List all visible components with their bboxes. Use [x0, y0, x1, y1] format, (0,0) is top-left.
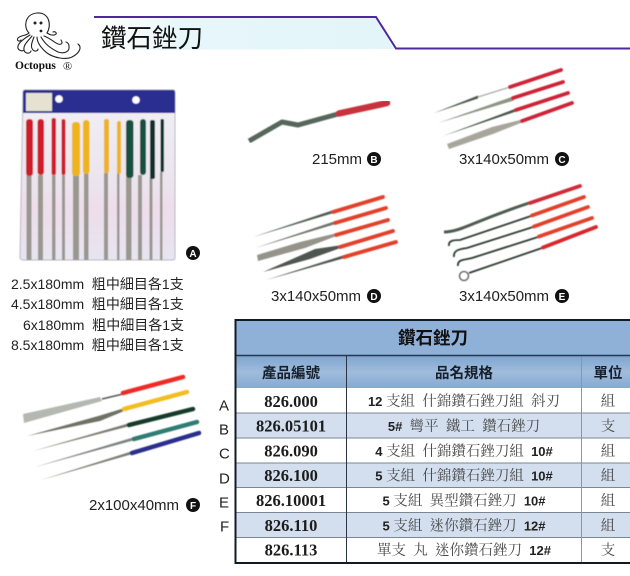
row B: 826.05101 [256, 416, 326, 436]
caption B: B [370, 155, 378, 166]
column headers: 產品編號 [262, 364, 320, 382]
row letters A to F: B [219, 422, 229, 438]
product photo D: 5 files [253, 197, 396, 280]
row G: 單支 丸 迷你鑽石銼刀 12# [377, 542, 552, 559]
row G: 826.113 [265, 540, 317, 560]
row B: 5# 彎平 鐵工 鑽石銼刀 [388, 418, 540, 435]
size list for A: 2.5x180mm 粗中細目各1支 [11, 276, 184, 292]
row F: 5 支組 迷你鑽石銼刀 12# [382, 518, 546, 534]
caption E: E [559, 292, 566, 303]
row E [256, 491, 616, 510]
row B [256, 416, 615, 436]
logo: octopus [15, 13, 80, 73]
caption D: 3x140x50mm [271, 288, 361, 305]
column headers: 品名規格 [435, 364, 493, 382]
row D: 組 [601, 468, 616, 484]
row A: 826.000 [264, 392, 318, 411]
title banner [94, 17, 630, 50]
product photo A: file pack [20, 90, 175, 260]
row D: 826.100 [264, 466, 318, 485]
size list for A: 4.5x180mm 粗中細目各1支 [11, 296, 184, 312]
row letters A to F: A [219, 398, 229, 414]
row C: 組 [601, 443, 616, 460]
column headers: 單位 [594, 364, 622, 382]
row E: 組 [601, 492, 616, 510]
caption D: D [370, 292, 378, 303]
product photo E: shaped files [444, 186, 596, 280]
product photo B: bent file [249, 103, 387, 141]
title: 鑽石銼刀 [101, 25, 203, 53]
row E: 5 支組 異型鑽石銼刀 10# [382, 492, 546, 510]
product photo C: 4 files [434, 70, 572, 149]
size list for A [11, 276, 184, 353]
row letters A to F: D [219, 470, 230, 488]
row F: 826.110 [265, 516, 317, 535]
row C [264, 442, 616, 460]
caption C: C [558, 155, 566, 166]
row G [265, 540, 615, 560]
product table [235, 319, 630, 564]
size list for A: 8.5x180mm 粗中細目各1支 [11, 337, 184, 353]
row F [265, 516, 616, 535]
caption F: 2x100x40mm [89, 497, 179, 514]
row A: 組 [601, 393, 616, 410]
size list for A: 6x180mm 粗中細目各1支 [23, 317, 184, 333]
row D: 5 支組 什錦鑽石銼刀組 10# [375, 468, 554, 484]
logo: octopus: ® [63, 59, 72, 73]
caption C: 3x140x50mm [459, 151, 549, 168]
row G: 支 [601, 542, 615, 559]
row A: 12 支組 什錦鑽石銼刀組 斜刃 [368, 393, 560, 410]
logo: octopus: Octopus [15, 60, 56, 72]
product photo F: mini files [23, 377, 199, 480]
label: A badge [186, 246, 200, 260]
row B: 支 [601, 418, 615, 435]
caption F: F [190, 501, 196, 512]
caption B: 215mm [312, 151, 362, 168]
column headers [262, 364, 622, 382]
row letters A to F [219, 398, 230, 536]
row C: 826.090 [264, 442, 318, 460]
table title: 鑽石銼刀 [398, 328, 468, 348]
row F: 組 [601, 518, 616, 534]
row letters A to F: F [220, 518, 229, 536]
row C: 4 支組 什錦鑽石銼刀組 10# [375, 443, 554, 460]
row letters A to F: E [219, 494, 229, 512]
row E: 826.10001 [256, 491, 326, 510]
row letters A to F: C [219, 446, 230, 462]
caption E: 3x140x50mm [459, 288, 549, 305]
row D [264, 466, 616, 485]
label: A badge: A [189, 249, 197, 260]
row A [264, 392, 616, 411]
